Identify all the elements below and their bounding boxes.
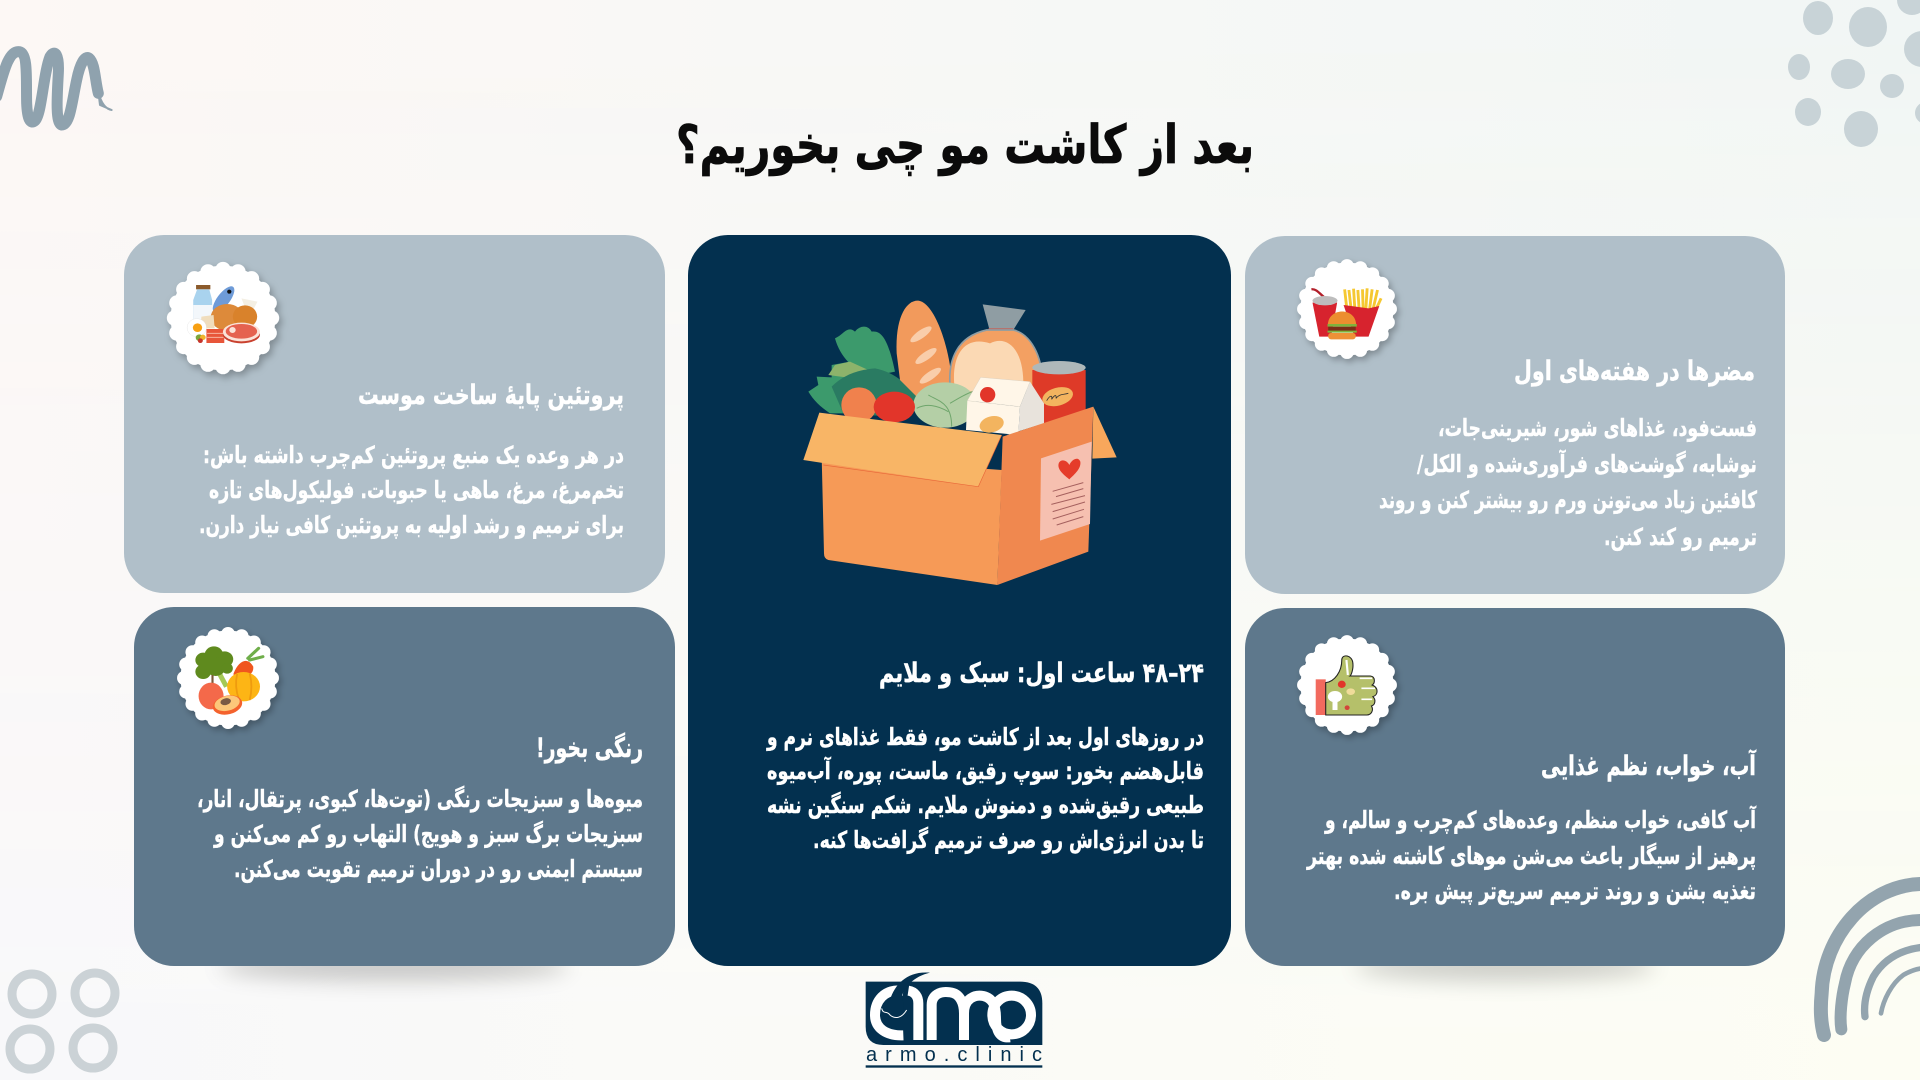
panel: protein (124, 235, 665, 593)
decoration: arcs bottom right (1821, 884, 1920, 1035)
text: first hours body: در روزهای اول بعد از کاشت مو، فقط غذاهای نرم و (766, 723, 1204, 751)
panel shadow: bottom right (1355, 951, 1655, 981)
decoration: squiggle top left (0, 52, 112, 125)
panel: water sleep diet (1245, 608, 1785, 966)
heading: harmful foods: مضرها در هفته‌های اول (1514, 356, 1755, 387)
text: first hours body: تا بدن انرژی‌اش رو صرف ترمیم گرافت‌ها کنه. (813, 826, 1204, 854)
text: first hours body: قابل‌هضم بخور: سوپ رقیق، ماست، پوره، آب‌میوه (767, 756, 1204, 785)
title: بعد از کاشت مو چی بخوریم؟ (676, 115, 1254, 176)
text: first hours body (766, 723, 1204, 854)
logo: armo clinic (866, 972, 1042, 1068)
text: harmful foods body: فست‌فود، غذاهای شور، شیرینی‌جات، (1438, 414, 1757, 442)
text: water sleep diet body (1306, 805, 1757, 905)
text: water sleep diet body: تغذیه بشن و روند ترمیم سریع‌تر پیش بره. (1394, 877, 1756, 905)
text: water sleep diet body: پرهیز از سیگار باعث می‌شن موهای کاشته شده بهتر (1306, 842, 1756, 870)
heading: water sleep diet: آب، خواب، نظم غذایی (1541, 749, 1757, 782)
text: water sleep diet body: آب کافی، خواب منظم، وعده‌های کم‌چرب و سالم، و (1324, 805, 1757, 834)
decoration: dots top right (1788, 0, 1920, 147)
text: harmful foods body: کافئین زیاد می‌تونن ورم رو بیشتر کنن و روند (1379, 486, 1757, 514)
heading: first hours: ۲۴–۴۸ ساعت اول: سبک و ملایم (879, 658, 1204, 689)
text: protein body (199, 441, 624, 539)
text: protein body: تخم‌مرغ، مرغ، ماهی یا حبوبات. فولیکول‌های تازه (209, 476, 624, 504)
decoration: rings bottom left (10, 973, 115, 1069)
illustration: grocery box (803, 301, 1117, 585)
icon: fruit and vegetables (177, 627, 279, 729)
text: harmful foods body (1379, 414, 1757, 551)
icon: fast food (1297, 259, 1397, 359)
text: colourful foods body: میوه‌ها و سبزیجات رنگی (توت‌ها، کیوی، پرتقال، انار، (197, 785, 643, 813)
icon: thumbs up (1297, 635, 1397, 735)
text: colourful foods body: سیستم ایمنی رو در دوران ترمیم تقویت می‌کنن. (234, 855, 643, 883)
panel shadow: bottom left (219, 951, 569, 981)
panel: first 24-48 hours (688, 235, 1231, 966)
text: harmful foods body: ترمیم رو کند کنن. (1604, 523, 1757, 551)
text: protein body: در هر وعده یک منبع پروتئین کم‌چرب داشته باش: (203, 441, 624, 469)
text: first hours body: طبیعی رقیق‌شده و دمنوش ملایم. شکم سنگین نشه (767, 791, 1204, 819)
text: colourful foods body (197, 785, 643, 883)
heading: protein: پروتئین پایهٔ ساخت موست (358, 380, 624, 411)
panel: harmful foods (1245, 236, 1785, 594)
text: protein body: برای ترمیم و رشد اولیه به پروتئین کافی نیاز دارن. (199, 511, 624, 539)
text: colourful foods body: سبزیجات برگ سبز و هویج) التهاب رو کم می‌کنن و (213, 820, 643, 848)
icon: protein foods (167, 262, 279, 374)
logo: armo clinic: armo.clinic (866, 1044, 1042, 1066)
panel: colourful foods (134, 607, 675, 966)
text: harmful foods body: نوشابه، گوشت‌های فرآوری‌شده و الکل/ (1417, 449, 1757, 478)
heading: colourful foods: رنگی بخور! (536, 732, 643, 764)
